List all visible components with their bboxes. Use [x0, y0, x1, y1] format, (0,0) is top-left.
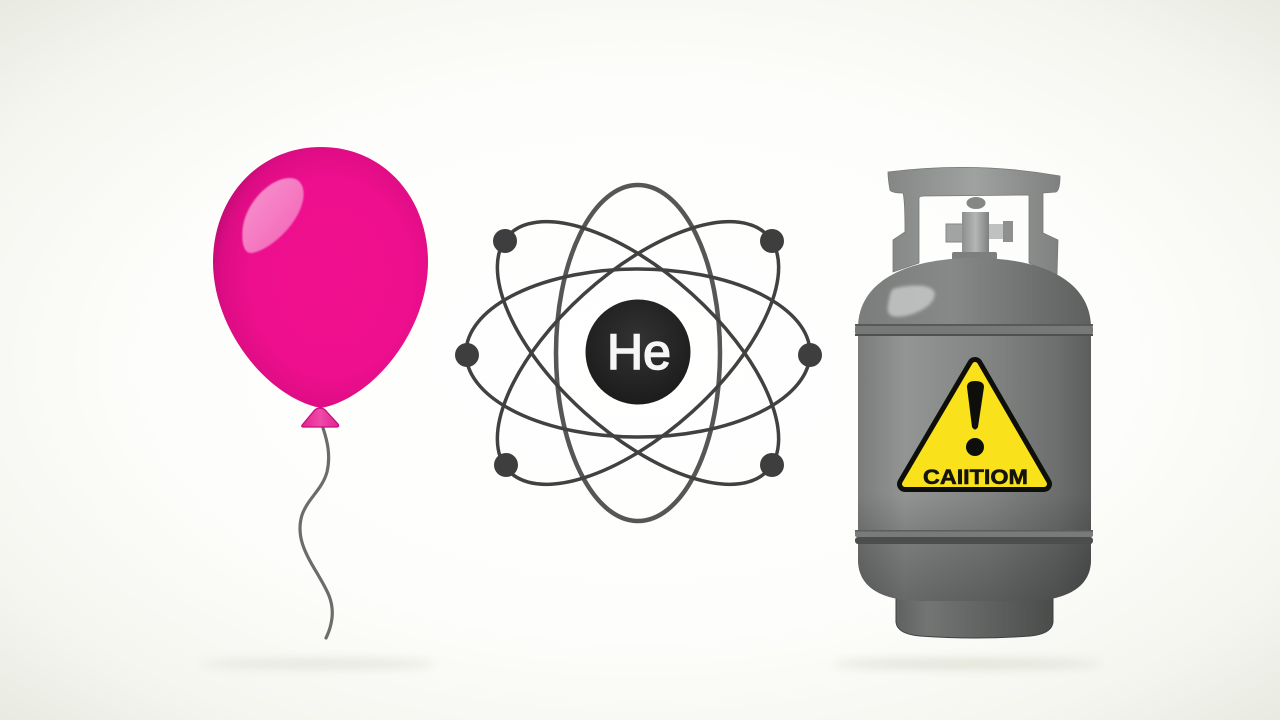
balloon highlight: [242, 178, 304, 253]
electron: bottom left: [494, 453, 518, 477]
nucleus label: He: [607, 324, 671, 380]
balloon: [213, 147, 428, 638]
cylinder foot ring: [896, 596, 1053, 638]
balloon string: [300, 428, 332, 638]
balloon envelope: [213, 147, 428, 408]
upper band: [855, 324, 1093, 336]
cylinder collar handle: [888, 167, 1060, 275]
atom diagram: [454, 176, 822, 530]
caution label: CAIITIOM: [923, 466, 1028, 489]
orbit: vertical: [556, 185, 720, 521]
electron: bottom right: [760, 453, 784, 477]
orbit: diagonal down: [454, 176, 822, 530]
cylinder valve: [946, 197, 1013, 260]
exclamation dot: [966, 438, 984, 456]
warning triangle fill: [905, 365, 1044, 484]
dome highlight: [888, 286, 935, 317]
caution sign: [905, 365, 1044, 489]
exclamation bar: [967, 381, 984, 430]
orbit: horizontal: [466, 269, 810, 437]
balloon ground shadow: [200, 659, 436, 669]
cylinder dome: [858, 258, 1091, 328]
warning triangle border: [905, 365, 1044, 484]
nucleus: [586, 300, 690, 404]
electron: top left: [493, 229, 517, 253]
electron: middle left: [455, 343, 479, 367]
electron: top right: [760, 229, 784, 253]
gas cylinder: [855, 167, 1093, 638]
orbit: diagonal up: [454, 176, 822, 530]
cylinder body: [858, 330, 1091, 601]
electron: middle right: [798, 343, 822, 367]
lower band: [855, 530, 1093, 544]
balloon knot: [302, 408, 339, 427]
cylinder ground shadow: [833, 659, 1103, 669]
